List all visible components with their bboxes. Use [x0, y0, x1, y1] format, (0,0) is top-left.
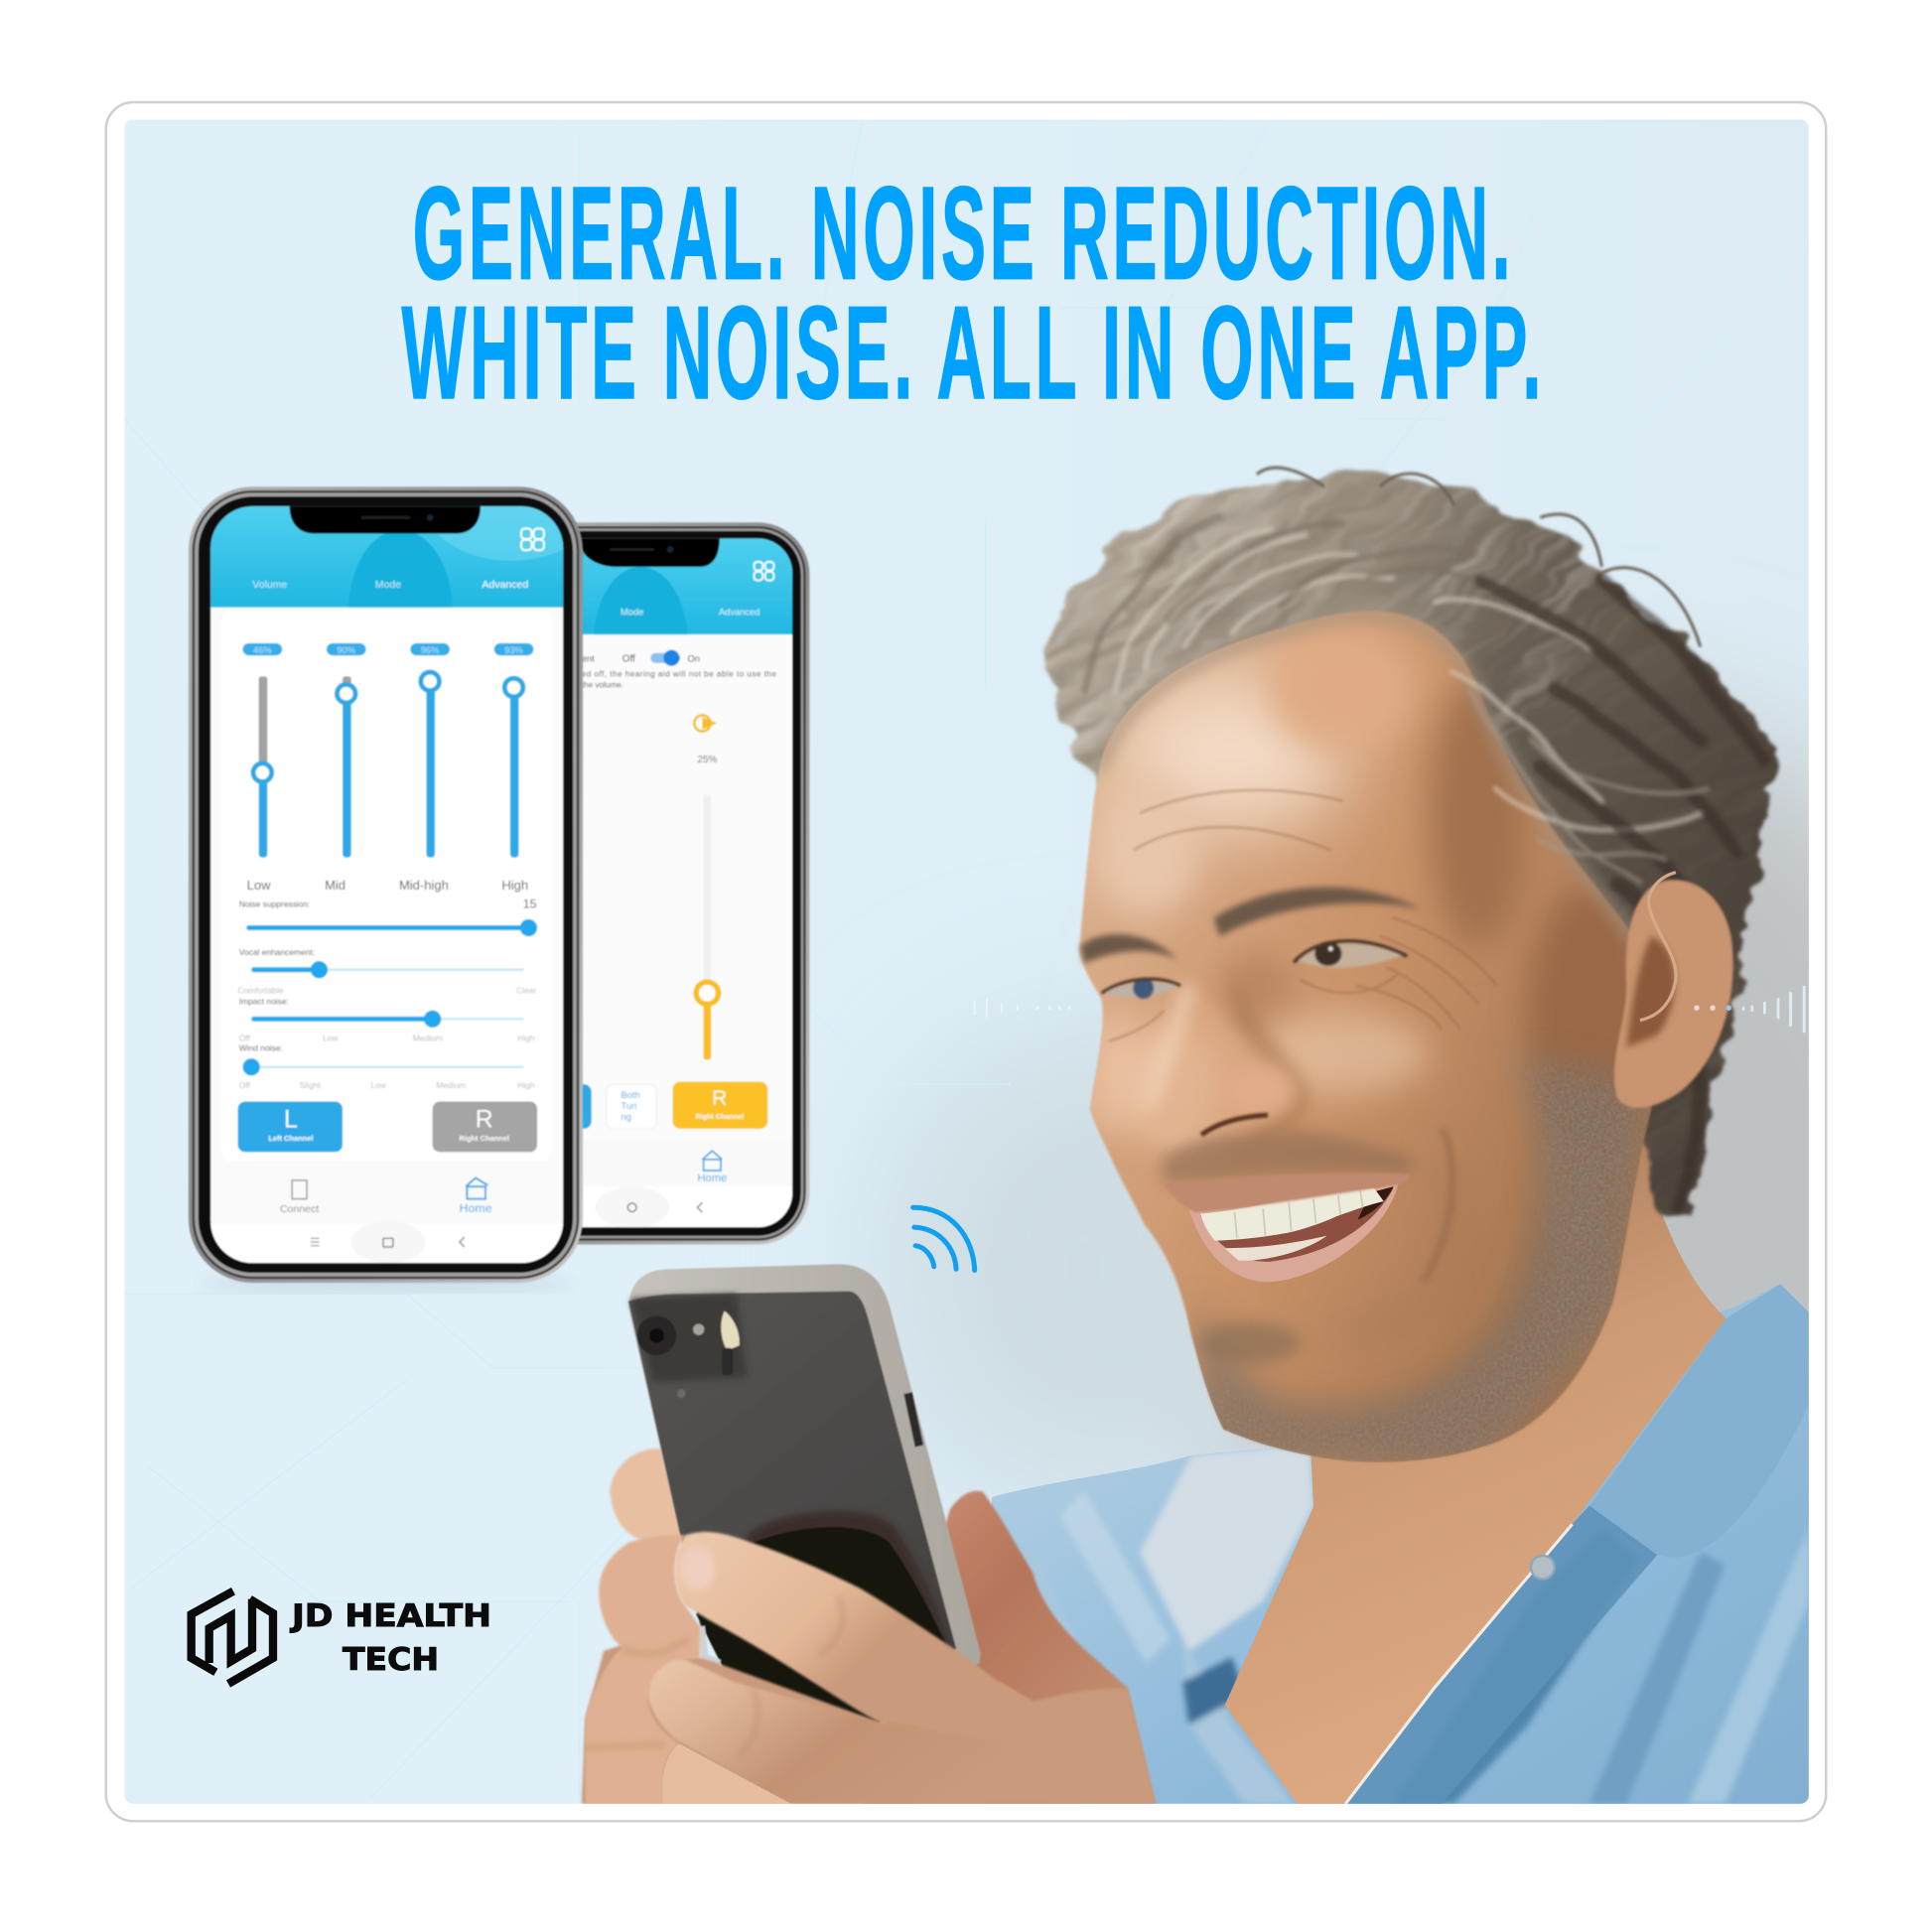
slider labels: High — [501, 878, 528, 893]
nasolabial fold — [1423, 1128, 1452, 1282]
system nav buttons — [311, 1221, 465, 1263]
teeth — [1200, 1187, 1384, 1241]
neck — [1225, 1090, 1726, 1804]
toggle — [650, 650, 680, 666]
noise suppression slider: 15 — [523, 897, 537, 911]
vocal enhancement slider — [238, 947, 536, 995]
upper lip — [1165, 1173, 1410, 1212]
thumb — [863, 1491, 1156, 1804]
soft hairline — [1100, 616, 1645, 949]
black grip — [727, 1511, 950, 1725]
vocal enhancement slider: Comfortable — [238, 985, 284, 995]
second finger — [648, 1660, 1035, 1804]
logo: JD Health Tech — [192, 1591, 491, 1684]
band pills: 46% — [253, 645, 272, 655]
vocal enhancement slider: Clear — [516, 985, 536, 995]
hair strands — [1084, 517, 1762, 1207]
home tab: Home — [460, 1201, 492, 1215]
impact noise slider: Medium — [413, 1034, 443, 1043]
impact noise slider — [239, 996, 535, 1043]
left channel button — [238, 1102, 343, 1152]
band pills — [242, 643, 533, 655]
hand base — [582, 1639, 1156, 1804]
brand name: JD HEALTH — [290, 1598, 491, 1634]
home tab — [460, 1177, 492, 1215]
slider labels: Low — [247, 878, 271, 893]
flyaway hair — [1257, 468, 1701, 647]
back phone: Advanced — [719, 607, 759, 617]
app header: Advanced — [482, 579, 528, 591]
right eye — [1294, 941, 1407, 968]
back phone: ed off, the hearing aid will not be able to use the — [582, 669, 776, 678]
impact noise slider: Off — [239, 1034, 251, 1043]
band pills: 90% — [337, 645, 355, 655]
shirt — [986, 1284, 1809, 1804]
face features — [1080, 888, 1422, 1282]
brand name: TECH — [343, 1642, 439, 1678]
wind noise slider: Off — [239, 1080, 251, 1090]
slider labels: Mid-high — [399, 878, 449, 893]
right channel button: R — [476, 1107, 493, 1134]
icon: wireless signal — [913, 1207, 975, 1271]
right channel button: R — [712, 1087, 727, 1110]
back phone: the volume. — [582, 681, 623, 690]
band pills: 93% — [504, 645, 523, 655]
back phone: On — [688, 653, 700, 663]
home icon — [702, 1151, 722, 1171]
slider labels — [247, 878, 528, 893]
back phone: Mode — [621, 607, 643, 617]
left eye — [1102, 978, 1180, 999]
left channel button: Left Channel — [268, 1134, 313, 1143]
brand name — [290, 1598, 491, 1678]
hair mass — [1041, 467, 1782, 1219]
band pills: 96% — [421, 645, 439, 655]
yellow slider — [696, 794, 719, 1059]
impact noise slider: Impact noise: — [239, 996, 289, 1006]
back phone: 25% — [697, 755, 717, 765]
vertical sliders — [253, 672, 523, 858]
noise suppression slider — [239, 897, 537, 936]
app header — [210, 450, 598, 690]
logo mark — [192, 1591, 273, 1684]
outer card — [106, 102, 1826, 1821]
app menu icon — [755, 562, 773, 581]
back phone: Off — [622, 653, 635, 664]
face — [1079, 611, 1651, 1472]
front phone — [189, 450, 598, 1292]
connect tab — [280, 1180, 319, 1215]
wind noise slider: Slight — [300, 1080, 321, 1090]
hearing aid wire — [1640, 873, 1676, 1021]
app menu icon — [521, 528, 544, 550]
left knuckles — [586, 1535, 700, 1804]
nav buttons — [595, 1186, 702, 1228]
left channel button: L — [284, 1107, 298, 1134]
wind noise slider: Medium — [436, 1080, 466, 1090]
impact noise slider: High — [517, 1034, 535, 1043]
both tuning button — [607, 1084, 656, 1129]
shirt collar — [1345, 1284, 1809, 1804]
speaker icon — [694, 715, 717, 732]
both tuning button: Both — [621, 1090, 640, 1100]
upper finger — [610, 1449, 685, 1543]
right channel button — [673, 1082, 767, 1129]
both tuning button: ng — [621, 1112, 631, 1122]
vocal enhancement slider: Vocal enhancement: — [239, 947, 315, 957]
connect tab: Connect — [280, 1203, 319, 1215]
mustache shade — [1162, 1129, 1414, 1184]
impact noise slider: Low — [323, 1034, 340, 1043]
wind noise slider: Wind noise: — [239, 1043, 283, 1053]
mouth — [1189, 1182, 1399, 1282]
third finger — [662, 1743, 791, 1804]
right channel button: Right Channel — [695, 1112, 744, 1121]
ear — [1614, 873, 1733, 1108]
hand and fingers — [582, 1532, 1156, 1804]
camera island — [630, 1294, 747, 1398]
app header: Volume — [252, 579, 287, 591]
right channel button: Right Channel — [460, 1134, 509, 1143]
main finger — [675, 1532, 1033, 1749]
both tuning button: Turi — [621, 1101, 636, 1111]
noise suppression slider: Noise suppression: — [239, 898, 310, 908]
right channel button — [433, 1102, 537, 1152]
title — [402, 160, 1545, 427]
app header: Mode — [375, 579, 401, 591]
nose — [1232, 973, 1309, 1140]
wind noise slider: High — [517, 1080, 535, 1090]
fingernail — [680, 1547, 715, 1590]
back phone: Home — [697, 1173, 727, 1184]
back phone: ent — [582, 653, 595, 663]
slider labels: Mid — [325, 878, 345, 893]
sound wave right — [1694, 986, 1806, 1033]
wind noise slider — [239, 1043, 535, 1090]
back phone — [492, 522, 809, 1244]
man with hearing aid — [580, 465, 1809, 1804]
wind noise slider: Low — [371, 1080, 387, 1090]
eyebrows — [1213, 888, 1422, 936]
sound wave left — [973, 998, 1071, 1018]
hand-held phone — [628, 1264, 981, 1725]
